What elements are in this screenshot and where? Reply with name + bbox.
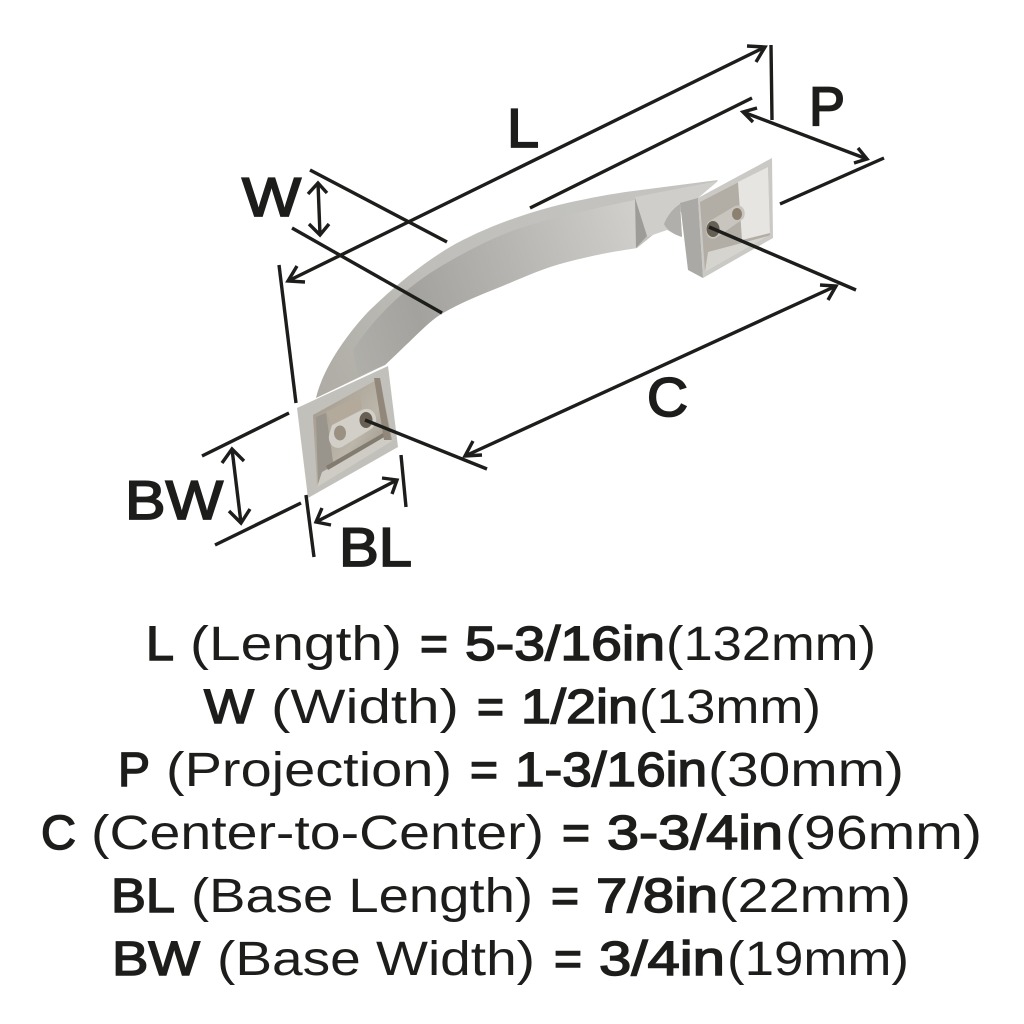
spec: length: L [146, 618, 174, 671]
spec: base width: BW [112, 933, 201, 986]
spec: center-to-center: (96mm) [785, 807, 982, 860]
label BL: BL [339, 516, 412, 578]
handle arc bevel [316, 180, 718, 398]
spec: base length: = [551, 870, 579, 923]
label C: C [647, 366, 688, 428]
right screw boss [706, 205, 745, 239]
spec: width [204, 681, 821, 734]
spec: base width: (19mm) [727, 933, 909, 986]
spec: length: (Length) [190, 618, 402, 671]
spec: projection: P [118, 744, 150, 797]
dimension BL [306, 455, 406, 557]
spec: width: (13mm) [639, 681, 821, 734]
specifications list [41, 618, 982, 986]
spec: projection: 1-3/16in [515, 744, 707, 797]
spec: width: (Width) [271, 681, 459, 734]
spec: base width: (Base Width) [217, 933, 535, 986]
spec: length: (132mm) [666, 618, 876, 671]
label W: W [242, 166, 301, 228]
spec: projection: (30mm) [708, 744, 904, 797]
spec: base length [111, 870, 911, 923]
label BW: BW [125, 469, 223, 531]
label L: L [507, 97, 539, 159]
spec: base length: (Base Length) [191, 870, 533, 923]
dimension L [279, 45, 772, 403]
dimension BW [202, 413, 301, 545]
spec: center-to-center [41, 807, 982, 860]
label P: P [809, 75, 845, 137]
handle neck [635, 181, 718, 237]
spec: length [146, 618, 876, 671]
spec: length: = [420, 618, 448, 671]
dimension P [743, 108, 884, 204]
spec: center-to-center: (Center-to-Center) [91, 807, 544, 860]
spec: width: = [477, 681, 504, 734]
illustration: cabinet pull handle [297, 158, 773, 498]
spec: center-to-center: = [562, 807, 590, 860]
spec: length: 5-3/16in [465, 618, 665, 671]
spec: width: 1/2in [521, 681, 638, 734]
spec: center-to-center: C [41, 807, 76, 860]
dimension W [292, 170, 447, 313]
spec: projection: (Projection) [166, 744, 452, 797]
right mounting plate [680, 158, 773, 278]
left mounting plate [297, 366, 398, 498]
spec: projection [118, 744, 904, 797]
spec: projection: = [470, 744, 498, 797]
spec: base width: = [554, 933, 582, 986]
spec: width: W [204, 681, 255, 734]
spec: base width: 3/4in [599, 933, 725, 986]
spec: center-to-center: 3-3/4in [607, 807, 783, 860]
spec: base width [112, 933, 909, 986]
spec: base length: BL [111, 870, 175, 923]
spec: base length: 7/8in [596, 870, 718, 923]
dimension lines and arrows [202, 45, 884, 557]
dimension C [365, 227, 856, 469]
spec: base length: (22mm) [719, 870, 911, 923]
left screw boss [326, 395, 376, 448]
handle arc face [353, 200, 637, 376]
